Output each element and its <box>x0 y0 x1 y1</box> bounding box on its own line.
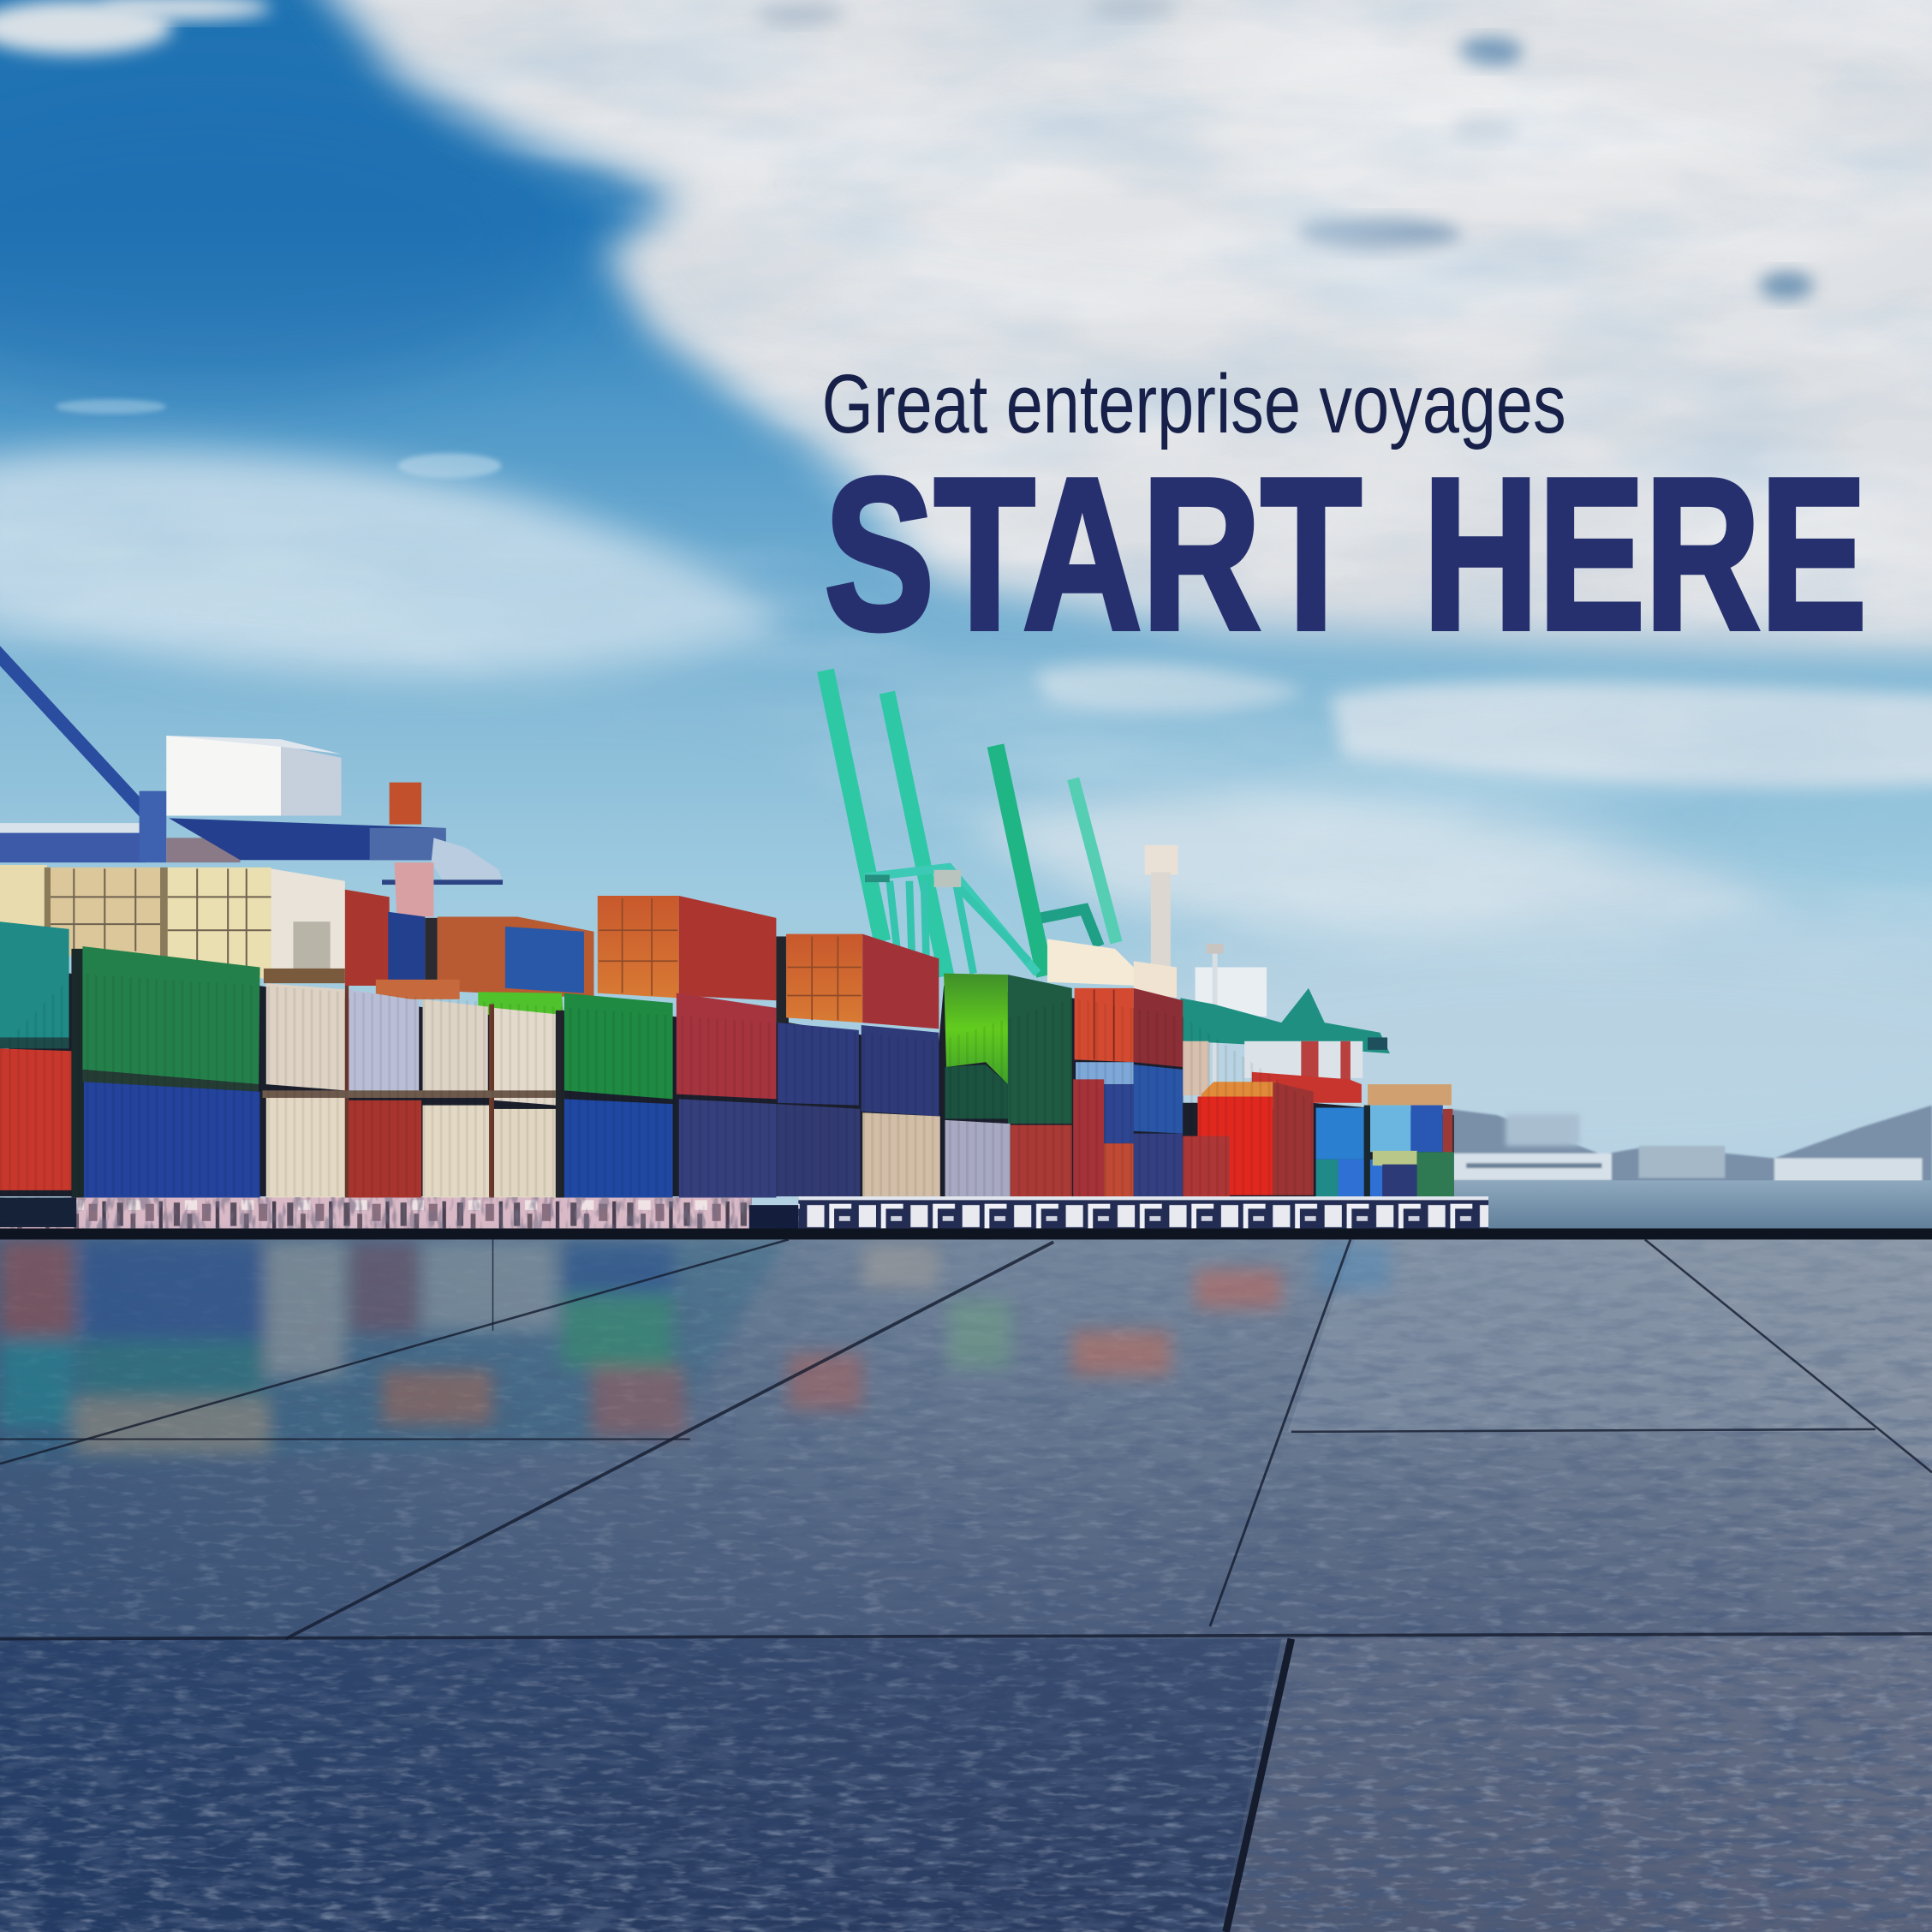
teal container <box>0 921 69 1042</box>
quay wall left <box>0 1197 752 1230</box>
distant teal gantry <box>1180 988 1390 1081</box>
main headline: START <box>825 434 1362 675</box>
waterfront warehouse <box>0 865 345 980</box>
orange container end <box>598 896 679 998</box>
floor paving joints <box>0 1239 1932 1932</box>
green container right <box>564 993 673 1099</box>
right container stacks <box>1183 1072 1454 1196</box>
navy container <box>679 1099 776 1197</box>
quay wall right <box>749 1196 1488 1232</box>
sky background <box>0 0 1932 1244</box>
container reflections on floor <box>0 1239 1390 1454</box>
blue container <box>84 1082 260 1197</box>
clouds <box>0 0 1932 1244</box>
red container side <box>679 896 776 1000</box>
central container stacks <box>776 934 1208 1196</box>
green cranes <box>826 671 1117 976</box>
harbour water <box>1452 1180 1932 1232</box>
red container <box>0 1048 71 1190</box>
distant mountains and shore <box>1448 1106 1932 1189</box>
left container stacks <box>0 896 776 1197</box>
blue container right <box>564 1099 673 1197</box>
blue gantry crane and cab <box>0 651 503 916</box>
container corrugation <box>0 974 1312 1196</box>
stone floor <box>0 1237 1932 1932</box>
subtitle: Great enterprise voyages <box>822 356 1566 450</box>
green container <box>82 946 260 1084</box>
quay shadow line <box>0 1228 1932 1239</box>
back row containers <box>345 890 593 1033</box>
white containers <box>266 983 345 1090</box>
container stack dark backing <box>0 949 1454 1196</box>
main headline <box>825 434 1867 675</box>
tower and terminal buildings <box>1047 845 1267 1084</box>
